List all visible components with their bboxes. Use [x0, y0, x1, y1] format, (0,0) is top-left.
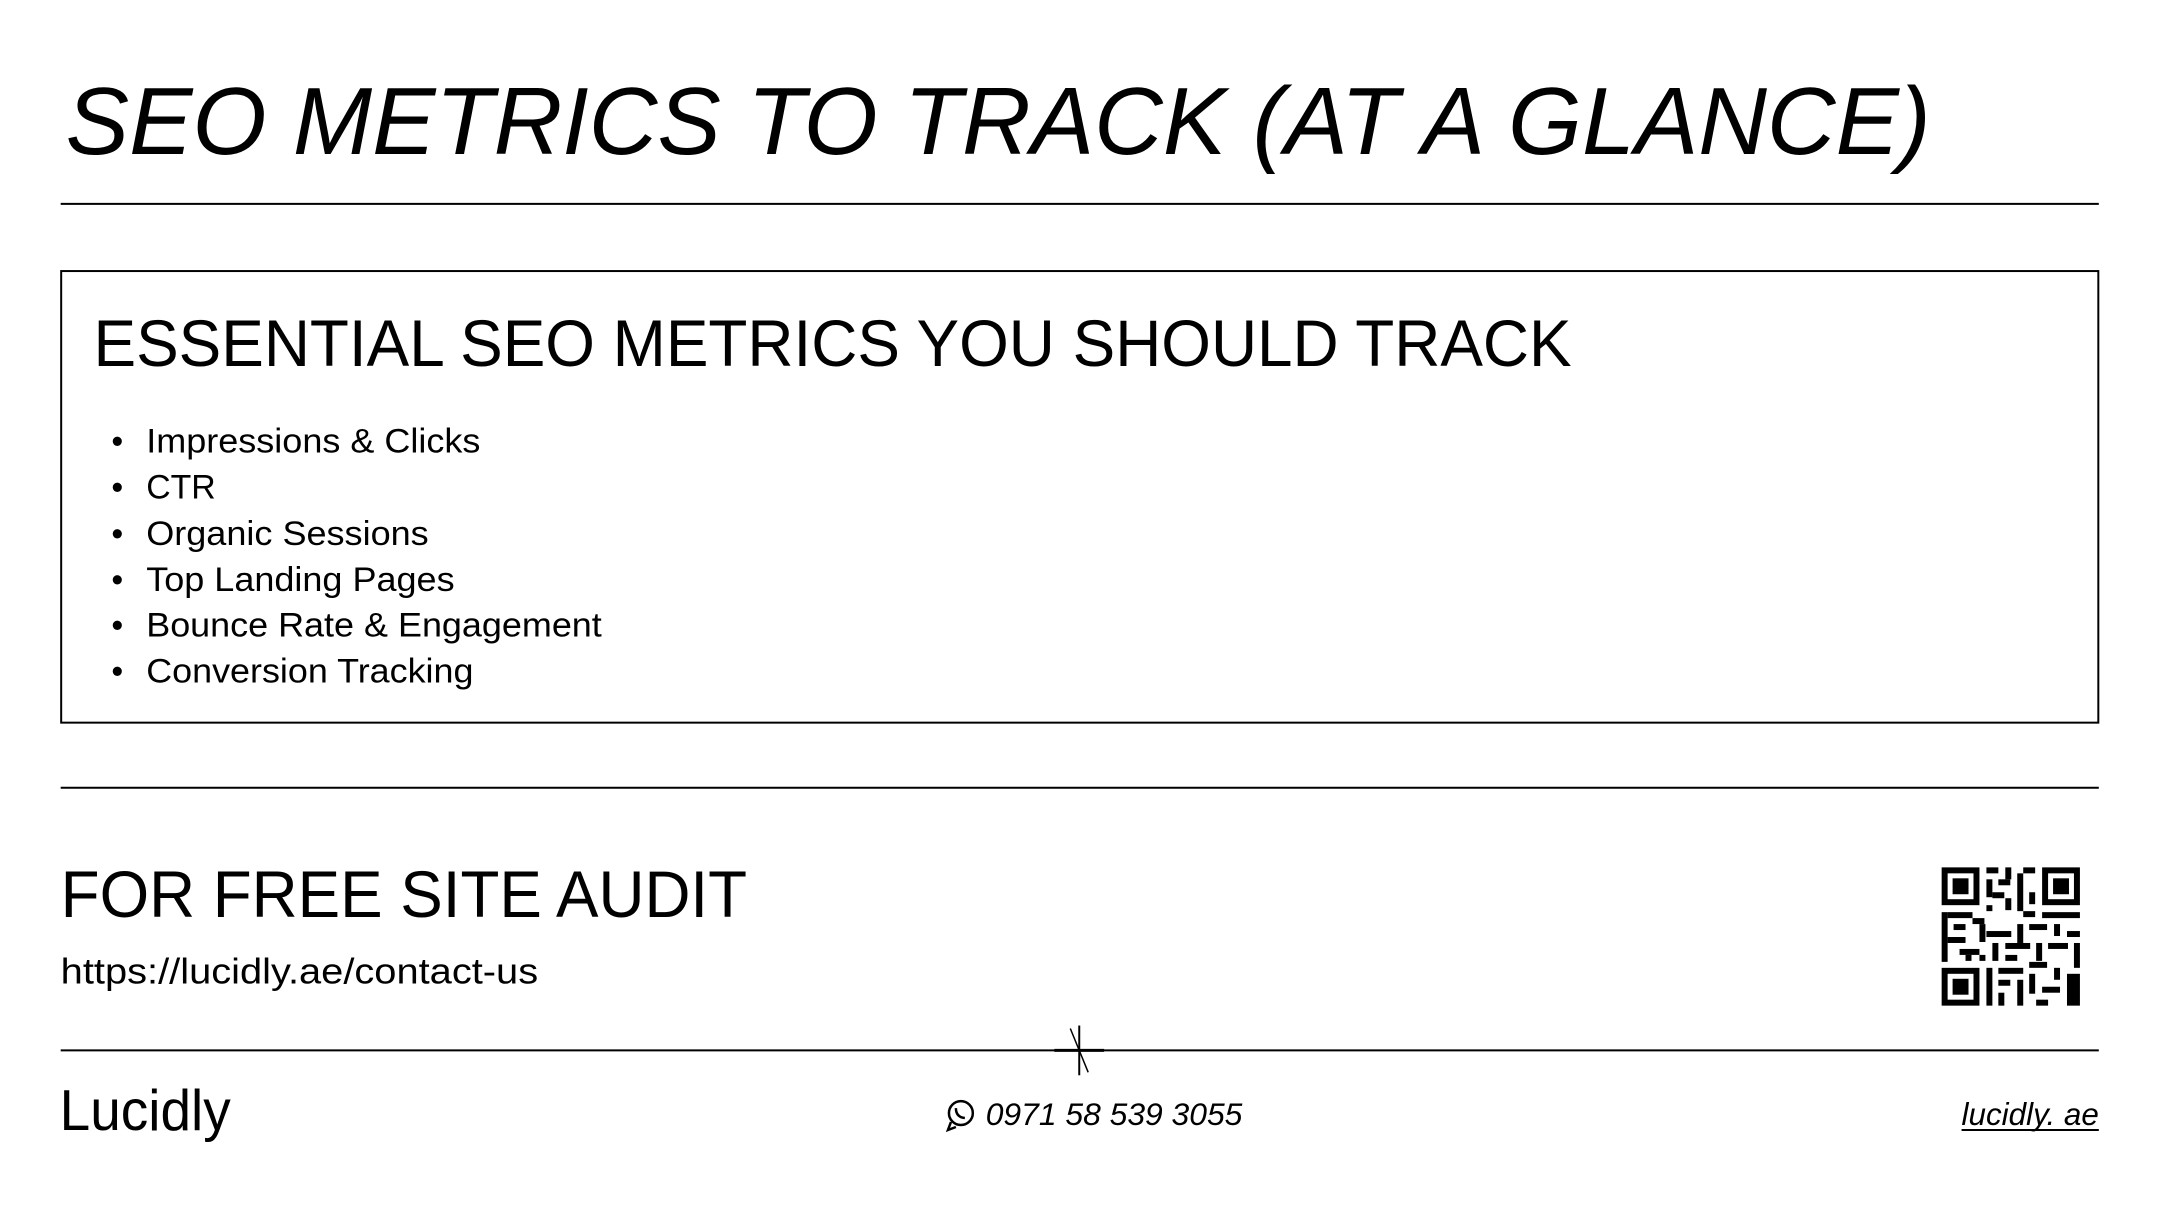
bullet list: Impressions & Clicks — [146, 423, 480, 461]
bullet list: • — [111, 515, 123, 553]
panel heading: ESSENTIAL SEO METRICS YOU SHOULD TRACK — [94, 307, 1572, 380]
bullet list: CTR — [146, 468, 216, 506]
icon: qr code — [1942, 867, 2080, 1006]
website link: lucidly. ae — [1962, 1096, 2099, 1132]
bullet list: Conversion Tracking — [146, 652, 473, 690]
icon: sparkle star — [1054, 1026, 1104, 1075]
icon: whatsapp — [948, 1101, 973, 1130]
panel: essential metrics — [61, 271, 2098, 723]
bullet list: Bounce Rate & Engagement — [146, 607, 602, 645]
bullet list: • — [111, 652, 123, 690]
title: SEO METRICS TO TRACK (AT A GLANCE) — [66, 69, 1931, 175]
bullet list: • — [111, 423, 123, 461]
call to action heading: FOR FREE SITE AUDIT — [61, 858, 747, 931]
bullet list — [111, 423, 602, 690]
url text: https://lucidly.ae/contact-us — [61, 952, 538, 992]
bullet list: Organic Sessions — [146, 515, 429, 553]
bullet list: • — [111, 607, 123, 645]
bullet list: Top Landing Pages — [146, 561, 455, 599]
phone contact: 0971 58 539 3055 — [986, 1096, 1243, 1132]
logo: Lucidly: Lucidly — [60, 1079, 231, 1143]
bullet list: • — [111, 468, 123, 506]
bullet list: • — [111, 561, 123, 599]
